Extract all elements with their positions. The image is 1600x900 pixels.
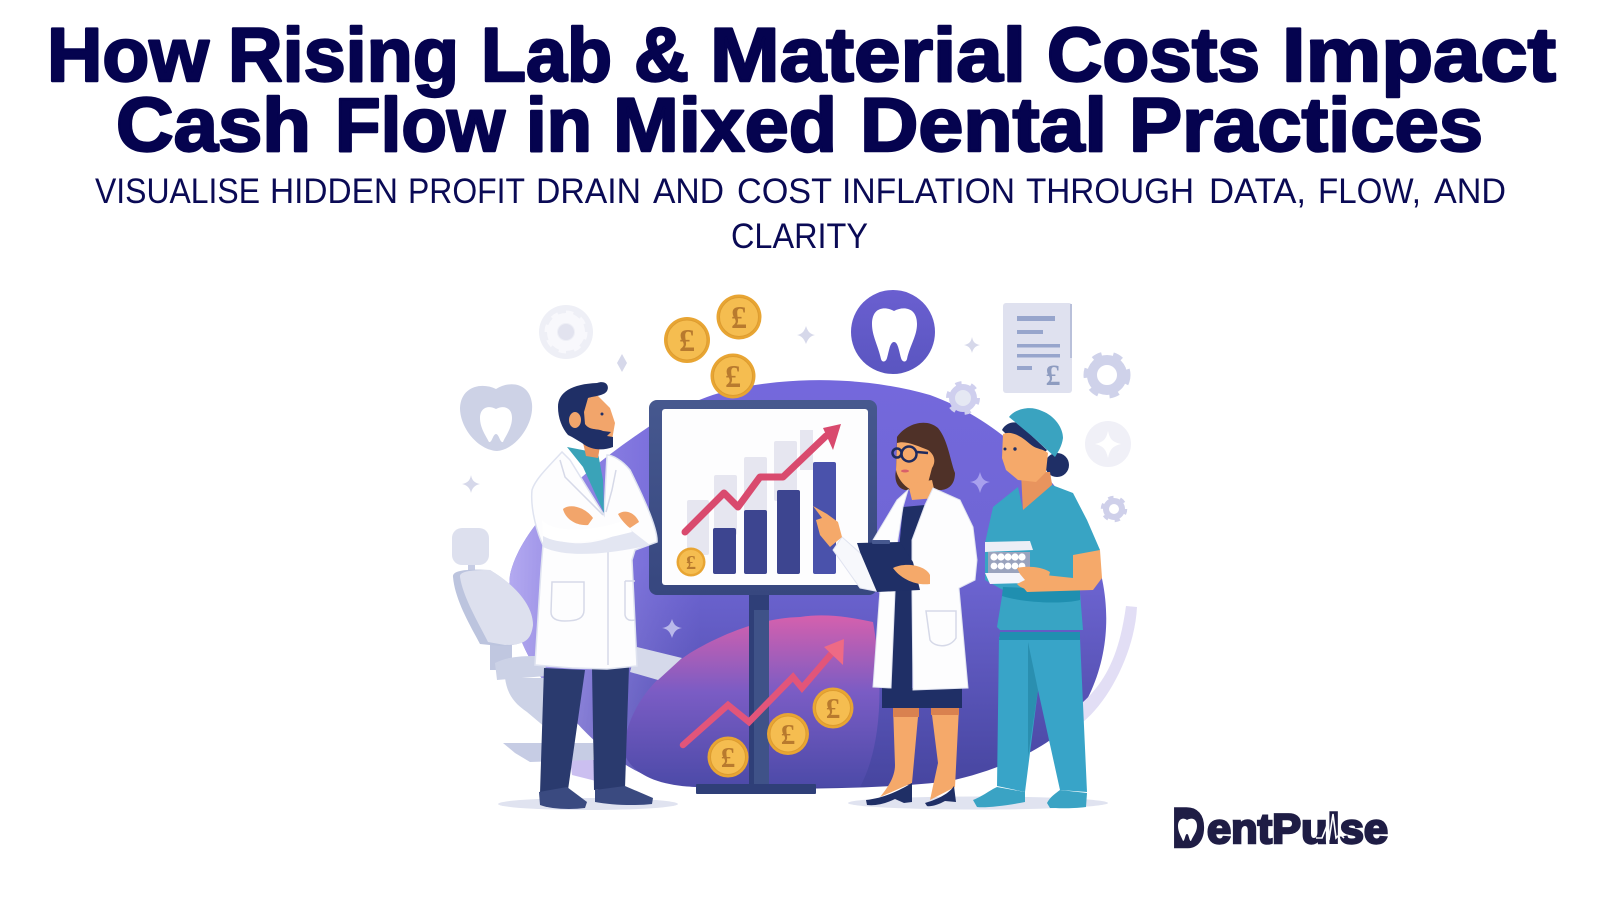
character: nurse	[973, 408, 1102, 808]
heels	[866, 783, 956, 806]
trouser shading	[1028, 642, 1038, 757]
subtitle: INFLATION	[842, 171, 1015, 211]
title: Dental	[860, 83, 1107, 168]
coin 3: £	[826, 693, 840, 725]
hair back	[895, 423, 955, 490]
title: How	[47, 13, 210, 98]
logo pulse line	[1316, 814, 1344, 840]
character: female dentist	[813, 423, 977, 806]
subtitle: FLOW,	[1318, 171, 1421, 211]
rising arrow on chart	[685, 424, 841, 532]
icon: tooth disc	[851, 290, 935, 374]
pointing hand	[813, 506, 842, 547]
icon: large gear	[1087, 355, 1127, 395]
holding hand	[893, 565, 930, 584]
legs	[880, 706, 959, 800]
coin 2	[767, 713, 809, 755]
subtitle: THROUGH	[1026, 171, 1194, 211]
chart coin: £	[686, 552, 696, 574]
monitor with bar chart	[649, 400, 877, 595]
subtitle: PROFIT	[408, 171, 525, 211]
subtitle: AND	[1434, 171, 1506, 211]
icon: pale tooth badge	[460, 384, 532, 451]
subtitle: VISUALISE	[95, 171, 260, 211]
hair	[1002, 422, 1047, 462]
lower coins	[708, 688, 854, 778]
monitor screen	[662, 409, 868, 585]
illustration: dental team reviewing rising costs	[452, 290, 1137, 810]
character: male dentist	[532, 382, 657, 809]
coin 3	[812, 688, 854, 728]
forearm	[1017, 550, 1102, 592]
surgical cap	[1009, 408, 1063, 457]
title: Material	[710, 13, 1026, 98]
neck	[908, 480, 936, 500]
blob left highlight	[509, 397, 707, 787]
icon: invoice document: £	[1046, 359, 1060, 392]
background purple blob	[509, 380, 1106, 789]
title: in	[526, 83, 592, 168]
subtitle: CLARITY	[731, 216, 868, 256]
coin 2: £	[731, 299, 747, 335]
subtitle: DRAIN	[536, 171, 641, 211]
coat pocket	[926, 611, 956, 646]
floor shadows	[498, 796, 1108, 810]
bun	[1045, 453, 1069, 477]
coin 3: £	[725, 358, 741, 394]
face	[1002, 433, 1048, 482]
falling coins	[664, 294, 762, 398]
lips	[901, 470, 909, 472]
pink gradient hill	[623, 615, 879, 787]
scrub hem band	[999, 632, 1080, 640]
title: Mixed	[613, 83, 837, 168]
eye	[600, 412, 604, 416]
title	[47, 13, 1556, 168]
logo D counter fill	[1178, 815, 1198, 843]
skirt	[882, 688, 962, 708]
hands	[563, 506, 639, 528]
subtitle	[95, 171, 1506, 256]
subtitle: DATA,	[1209, 171, 1306, 211]
waist band	[1002, 587, 1080, 603]
pointing arm	[833, 537, 890, 592]
subtitle: HIDDEN	[270, 171, 398, 211]
glasses	[892, 446, 928, 462]
presentation stand	[696, 595, 816, 794]
crossed arms shadow	[543, 528, 650, 554]
title: Lab	[481, 13, 612, 98]
trousers	[540, 667, 629, 793]
hand	[1017, 567, 1050, 590]
coin 1	[708, 736, 748, 778]
lab coat	[873, 488, 977, 690]
logo: DentPulse	[1172, 796, 1388, 859]
clipboard	[857, 542, 920, 592]
chart coin	[676, 548, 706, 576]
title: Cash	[116, 83, 311, 168]
icon: pale gear disc	[539, 305, 593, 359]
foreground bars	[713, 462, 836, 574]
title: &	[634, 13, 689, 98]
sparkles	[462, 326, 990, 638]
title: Rising	[228, 13, 459, 98]
trousers	[997, 637, 1087, 792]
lavender floor patch	[570, 760, 600, 782]
lab coat	[532, 452, 657, 669]
scrub top	[985, 485, 1100, 630]
coin 2: £	[781, 719, 795, 751]
eye and brow	[1004, 447, 1017, 451]
lavender crescent	[1082, 606, 1137, 722]
coin 1: £	[679, 322, 695, 358]
subtitle: AND	[653, 171, 724, 211]
coat details	[551, 460, 635, 665]
ear	[569, 412, 581, 428]
neck	[1021, 472, 1053, 512]
logo wordmark: entPulse	[1207, 805, 1388, 852]
title: Practices	[1129, 83, 1483, 168]
dress	[885, 505, 925, 690]
icon: dental chair	[452, 528, 682, 762]
background bars	[687, 430, 813, 555]
monitor frame	[649, 400, 877, 595]
logo tooth	[1178, 819, 1197, 841]
shirt	[567, 447, 604, 513]
dental model	[985, 541, 1033, 584]
hair and beard	[558, 382, 613, 449]
face	[896, 442, 934, 490]
icon: tiny gear	[1103, 498, 1125, 520]
neck	[582, 438, 601, 458]
clipboard clip	[872, 540, 890, 544]
icon: invoice document	[1003, 303, 1072, 393]
title: Impact	[1282, 13, 1556, 98]
icon: small purple gear	[948, 384, 978, 412]
shoes	[973, 787, 1087, 808]
leg shadow	[893, 706, 959, 717]
lower rising arrow	[683, 639, 844, 745]
title: Flow	[335, 83, 506, 168]
subtitle: COST	[737, 171, 832, 211]
face	[578, 395, 615, 445]
title: Costs	[1047, 13, 1260, 98]
icon: sparkle disc	[1085, 421, 1131, 467]
logo letter D: D	[1172, 796, 1205, 859]
shoes	[539, 786, 653, 809]
coin 1: £	[721, 742, 735, 774]
